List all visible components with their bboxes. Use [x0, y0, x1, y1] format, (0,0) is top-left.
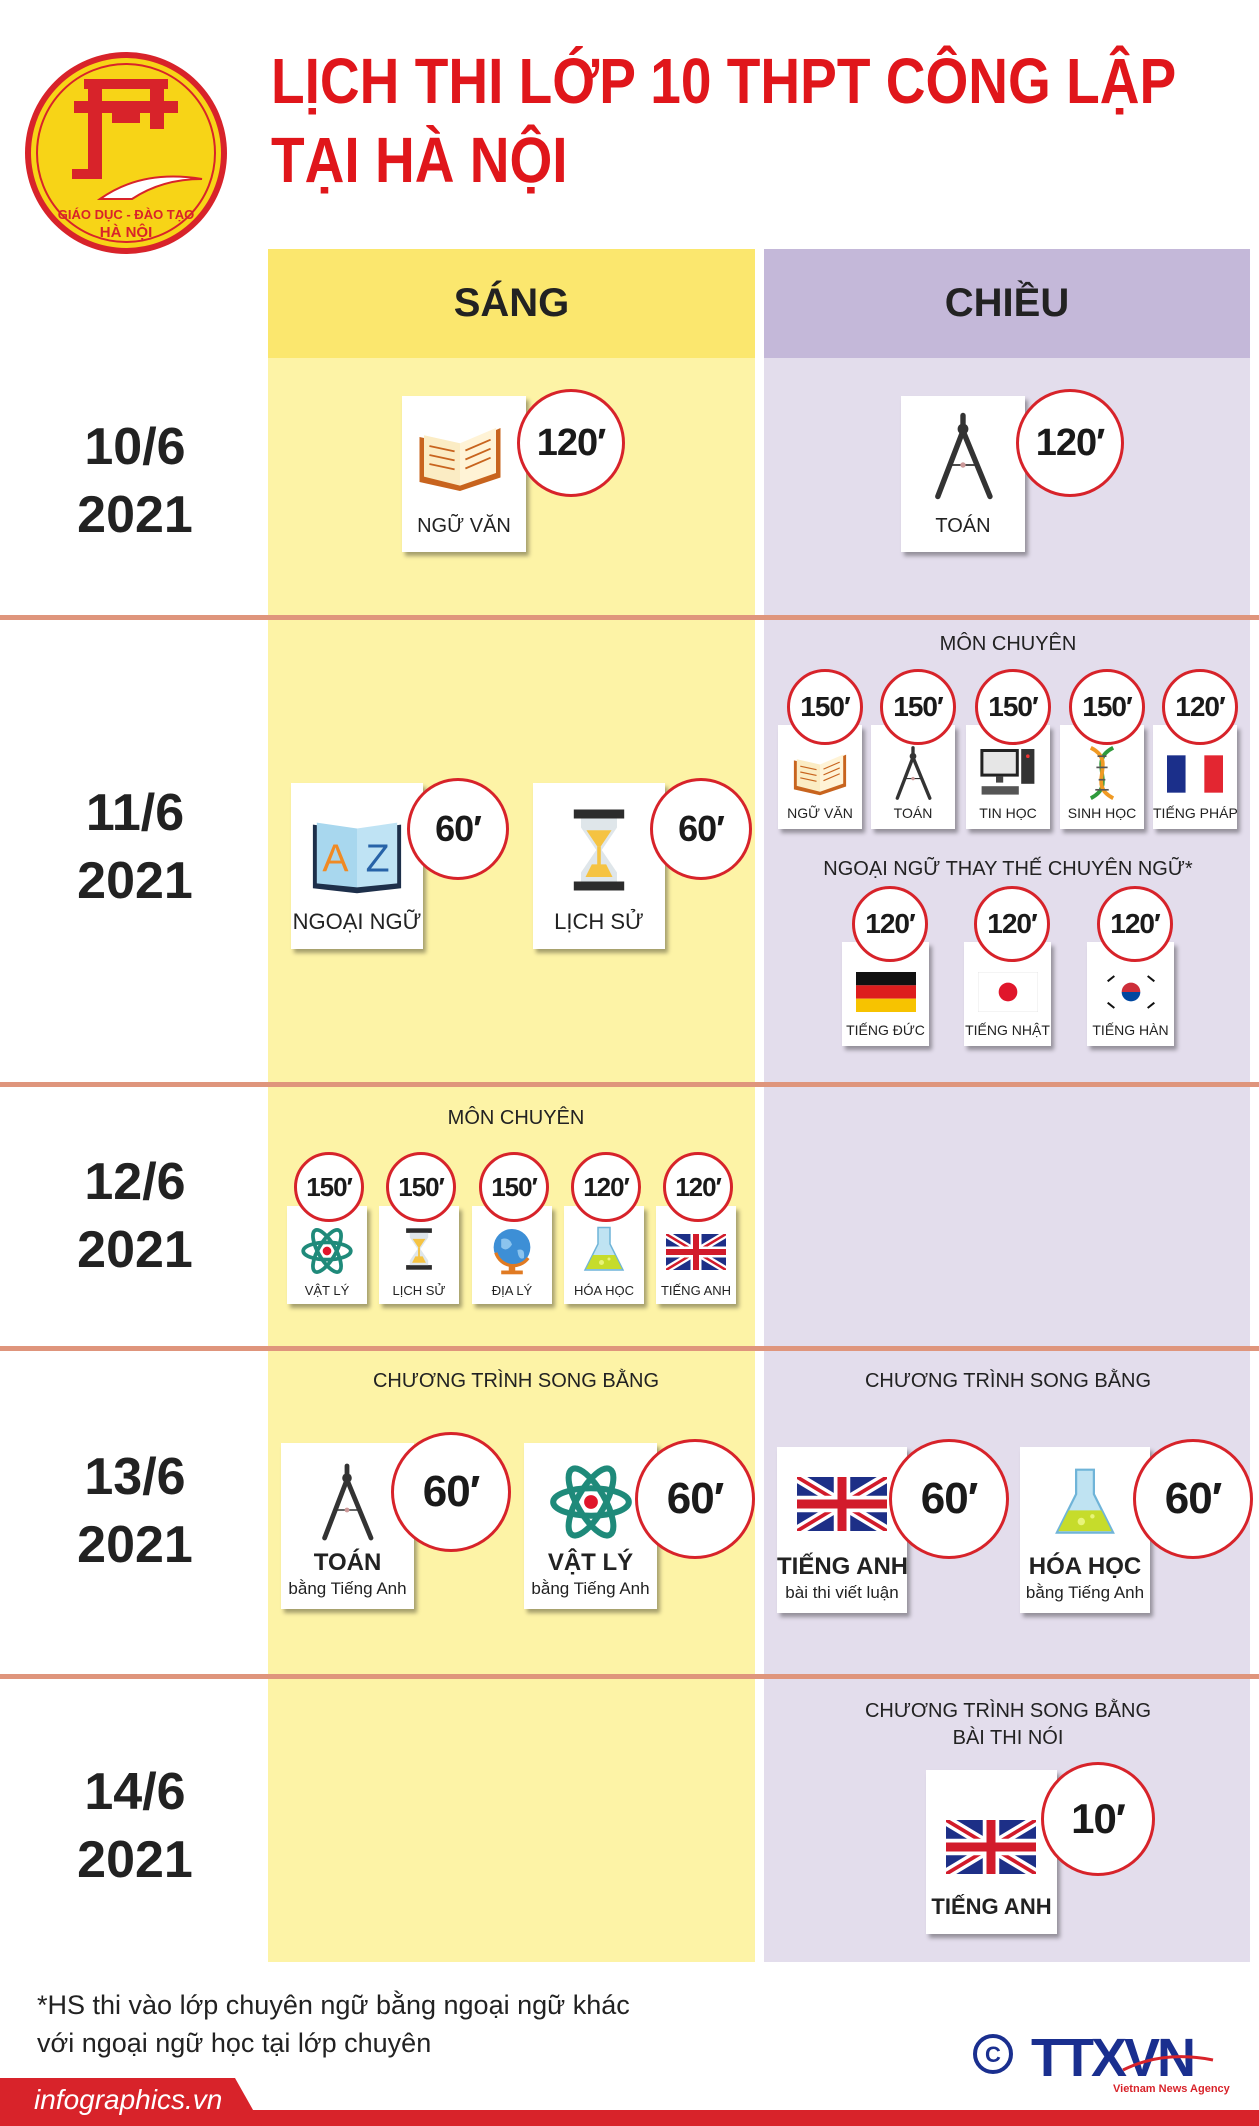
date 12/6: 2021: [77, 1221, 193, 1279]
date 14/6: 14/6: [84, 1763, 186, 1821]
logo: GIÁO DỤC - ĐÀO TẠO: [58, 207, 194, 222]
footnote: [37, 1990, 630, 2058]
exam: địa lý: [472, 1206, 552, 1304]
subheading: song bằng sáng: CHƯƠNG TRÌNH SONG BẰNG: [373, 1370, 659, 1392]
footer bar: infographics.vn: [34, 2084, 222, 2115]
exam: địa lý: ĐỊA LÝ: [492, 1283, 532, 1298]
subheading: môn chuyên chiều 11/6: MÔN CHUYÊN: [940, 633, 1076, 655]
text: 120′: [583, 1172, 629, 1202]
exam: chuyên sinh học: SINH HỌC: [1068, 805, 1136, 821]
heading: sáng: [268, 249, 755, 358]
exam: hóa học bằng tiếng anh: HÓA HỌC: [1029, 1553, 1141, 1580]
text: 60′: [921, 1474, 977, 1523]
exam: tiếng nhật: TIẾNG NHẬT: [965, 1022, 1050, 1038]
exam: chuyên toán: [871, 725, 955, 829]
heading: chiều: CHIỀU: [945, 281, 1069, 325]
text: 10′: [1071, 1795, 1125, 1842]
exam: hóa học bằng tiếng anh: bằng Tiếng Anh: [1026, 1583, 1144, 1602]
heading: sáng: SÁNG: [454, 281, 569, 325]
exam: tiếng anh bài thi viết luận: [777, 1447, 907, 1613]
date 11/6: 2021: [77, 852, 193, 910]
exam: vật lý: VẬT LÝ: [305, 1283, 349, 1298]
footnote: *HS thi vào lớp chuyên ngữ bằng ngoại ngữ khác: [37, 1990, 630, 2020]
exam: vật lý bằng tiếng anh: bằng Tiếng Anh: [531, 1579, 650, 1598]
exam: lịch sử chuyên: [379, 1206, 459, 1304]
exam: chuyên ngữ văn: [778, 725, 862, 829]
exam: toán 120: TOÁN: [935, 515, 991, 537]
exam: chuyên tin học: TIN HỌC: [979, 805, 1037, 821]
subheading: song bằng bài thi nói: BÀI THI NÓI: [953, 1727, 1063, 1749]
exam: tiếng nhật: [964, 942, 1051, 1046]
logo: HÀ NỘI: [100, 223, 152, 241]
title: TẠI HÀ NỘI: [271, 124, 568, 196]
exam: lịch sử 60: LỊCH SỬ: [554, 909, 644, 934]
exam: chuyên tin học: [966, 725, 1050, 829]
exam: toán bằng tiếng anh: TOÁN: [314, 1549, 381, 1576]
exam: toán bằng tiếng anh: [281, 1443, 414, 1609]
text: 150′: [988, 691, 1038, 722]
logo: [25, 52, 227, 254]
heading: chiều: [764, 249, 1250, 358]
exam: tiếng anh nói 10: TIẾNG ANH: [931, 1894, 1052, 1919]
subheading: song bằng bài thi nói: CHƯƠNG TRÌNH SONG BẰNG: [865, 1700, 1151, 1722]
exam: tiếng đức: TIẾNG ĐỨC: [846, 1022, 925, 1038]
text: 120′: [537, 422, 605, 464]
text: 120′: [987, 908, 1037, 939]
title: LỊCH THI LỚP 10 THPT CÔNG LẬP: [271, 45, 1176, 117]
text: 60′: [1165, 1474, 1221, 1523]
title: [271, 45, 1176, 196]
exam: tiếng anh chuyên: [656, 1206, 736, 1304]
exam: hóa học: [564, 1206, 644, 1304]
date 10/6: [77, 418, 193, 544]
panel: sáng column: [268, 249, 755, 1962]
exam: chuyên toán: TOÁN: [894, 805, 932, 821]
date 10/6: 2021: [77, 486, 193, 544]
exam: vật lý bằng tiếng anh: [524, 1443, 657, 1609]
exam: tiếng anh bài thi viết luận: TIẾNG ANH: [777, 1553, 908, 1580]
text: 60′: [667, 1474, 723, 1523]
subheading: song bằng bài thi nói: [865, 1698, 1151, 1749]
date 11/6: [77, 784, 193, 910]
exam: hóa học bằng tiếng anh: [1020, 1447, 1150, 1613]
text: 150′: [491, 1172, 537, 1202]
text: 150′: [398, 1172, 444, 1202]
exam: lịch sử chuyên: LỊCH SỬ: [392, 1283, 446, 1298]
date 13/6: 2021: [77, 1516, 193, 1574]
text: 120′: [1036, 422, 1104, 464]
text: 150′: [800, 691, 850, 722]
exam: ngữ văn 120: [402, 396, 526, 552]
exam: vật lý: [287, 1206, 367, 1304]
date 14/6: 2021: [77, 1831, 193, 1889]
exam: tiếng anh nói 10: [926, 1770, 1057, 1934]
subheading: song bằng chiều: CHƯƠNG TRÌNH SONG BẰNG: [865, 1370, 1151, 1392]
text: 120′: [675, 1172, 721, 1202]
text: 120′: [1110, 908, 1160, 939]
panel: chiều column: [764, 249, 1250, 1962]
exam: toán bằng tiếng anh: bằng Tiếng Anh: [288, 1579, 407, 1598]
text: 150′: [306, 1172, 352, 1202]
date 12/6: 12/6: [84, 1153, 186, 1211]
exam: chuyên sinh học: [1060, 725, 1144, 829]
footer bar: [0, 2078, 1259, 2126]
subheading: ngoại ngữ thay thế: NGOẠI NGỮ THAY THẾ CHUYÊN NGỮ*: [823, 858, 1193, 880]
exam: chuyên ngữ văn: NGỮ VĂN: [787, 805, 853, 821]
logo: TTXVN: C: [985, 2042, 1001, 2067]
exam: vật lý bằng tiếng anh: VẬT LÝ: [548, 1549, 633, 1576]
text: 150′: [1082, 691, 1132, 722]
text: 60′: [435, 808, 481, 849]
exam: tiếng đức: [842, 942, 929, 1046]
date 10/6: 10/6: [84, 418, 186, 476]
date 13/6: 13/6: [84, 1448, 186, 1506]
exam: ngữ văn 120: NGỮ VĂN: [417, 515, 511, 537]
text: 150′: [893, 691, 943, 722]
exam: hóa học: HÓA HỌC: [574, 1283, 634, 1298]
subheading: môn chuyên sáng 12/6: MÔN CHUYÊN: [448, 1107, 584, 1129]
exam: tiếng anh bài thi viết luận: bài thi viết luận: [785, 1583, 899, 1602]
exam: ngoại ngữ 60: NGOẠI NGỮ: [293, 909, 421, 934]
text: 60′: [423, 1467, 479, 1516]
exam: ngoại ngữ 60: [291, 783, 423, 949]
exam: lịch sử 60: [533, 783, 665, 949]
text: 120′: [865, 908, 915, 939]
exam: toán 120: [901, 396, 1025, 552]
exam: tiếng hàn: [1087, 942, 1174, 1046]
exam: chuyên tiếng pháp: [1153, 725, 1237, 829]
date 12/6: [77, 1153, 193, 1279]
exam: chuyên tiếng pháp: TIẾNG PHÁP: [1153, 805, 1238, 821]
text: 120′: [1175, 691, 1225, 722]
exam: tiếng hàn: TIẾNG HÀN: [1092, 1022, 1169, 1038]
date 13/6: [77, 1448, 193, 1574]
logo: TTXVN: Vietnam News Agency: [1113, 2083, 1231, 2095]
logo: TTXVN: [973, 2030, 1231, 2095]
exam: tiếng anh chuyên: TIẾNG ANH: [661, 1283, 731, 1298]
date 11/6: 11/6: [86, 784, 184, 842]
footnote: với ngoại ngữ học tại lớp chuyên: [37, 2028, 431, 2058]
text: 60′: [678, 808, 724, 849]
date 14/6: [77, 1763, 193, 1889]
